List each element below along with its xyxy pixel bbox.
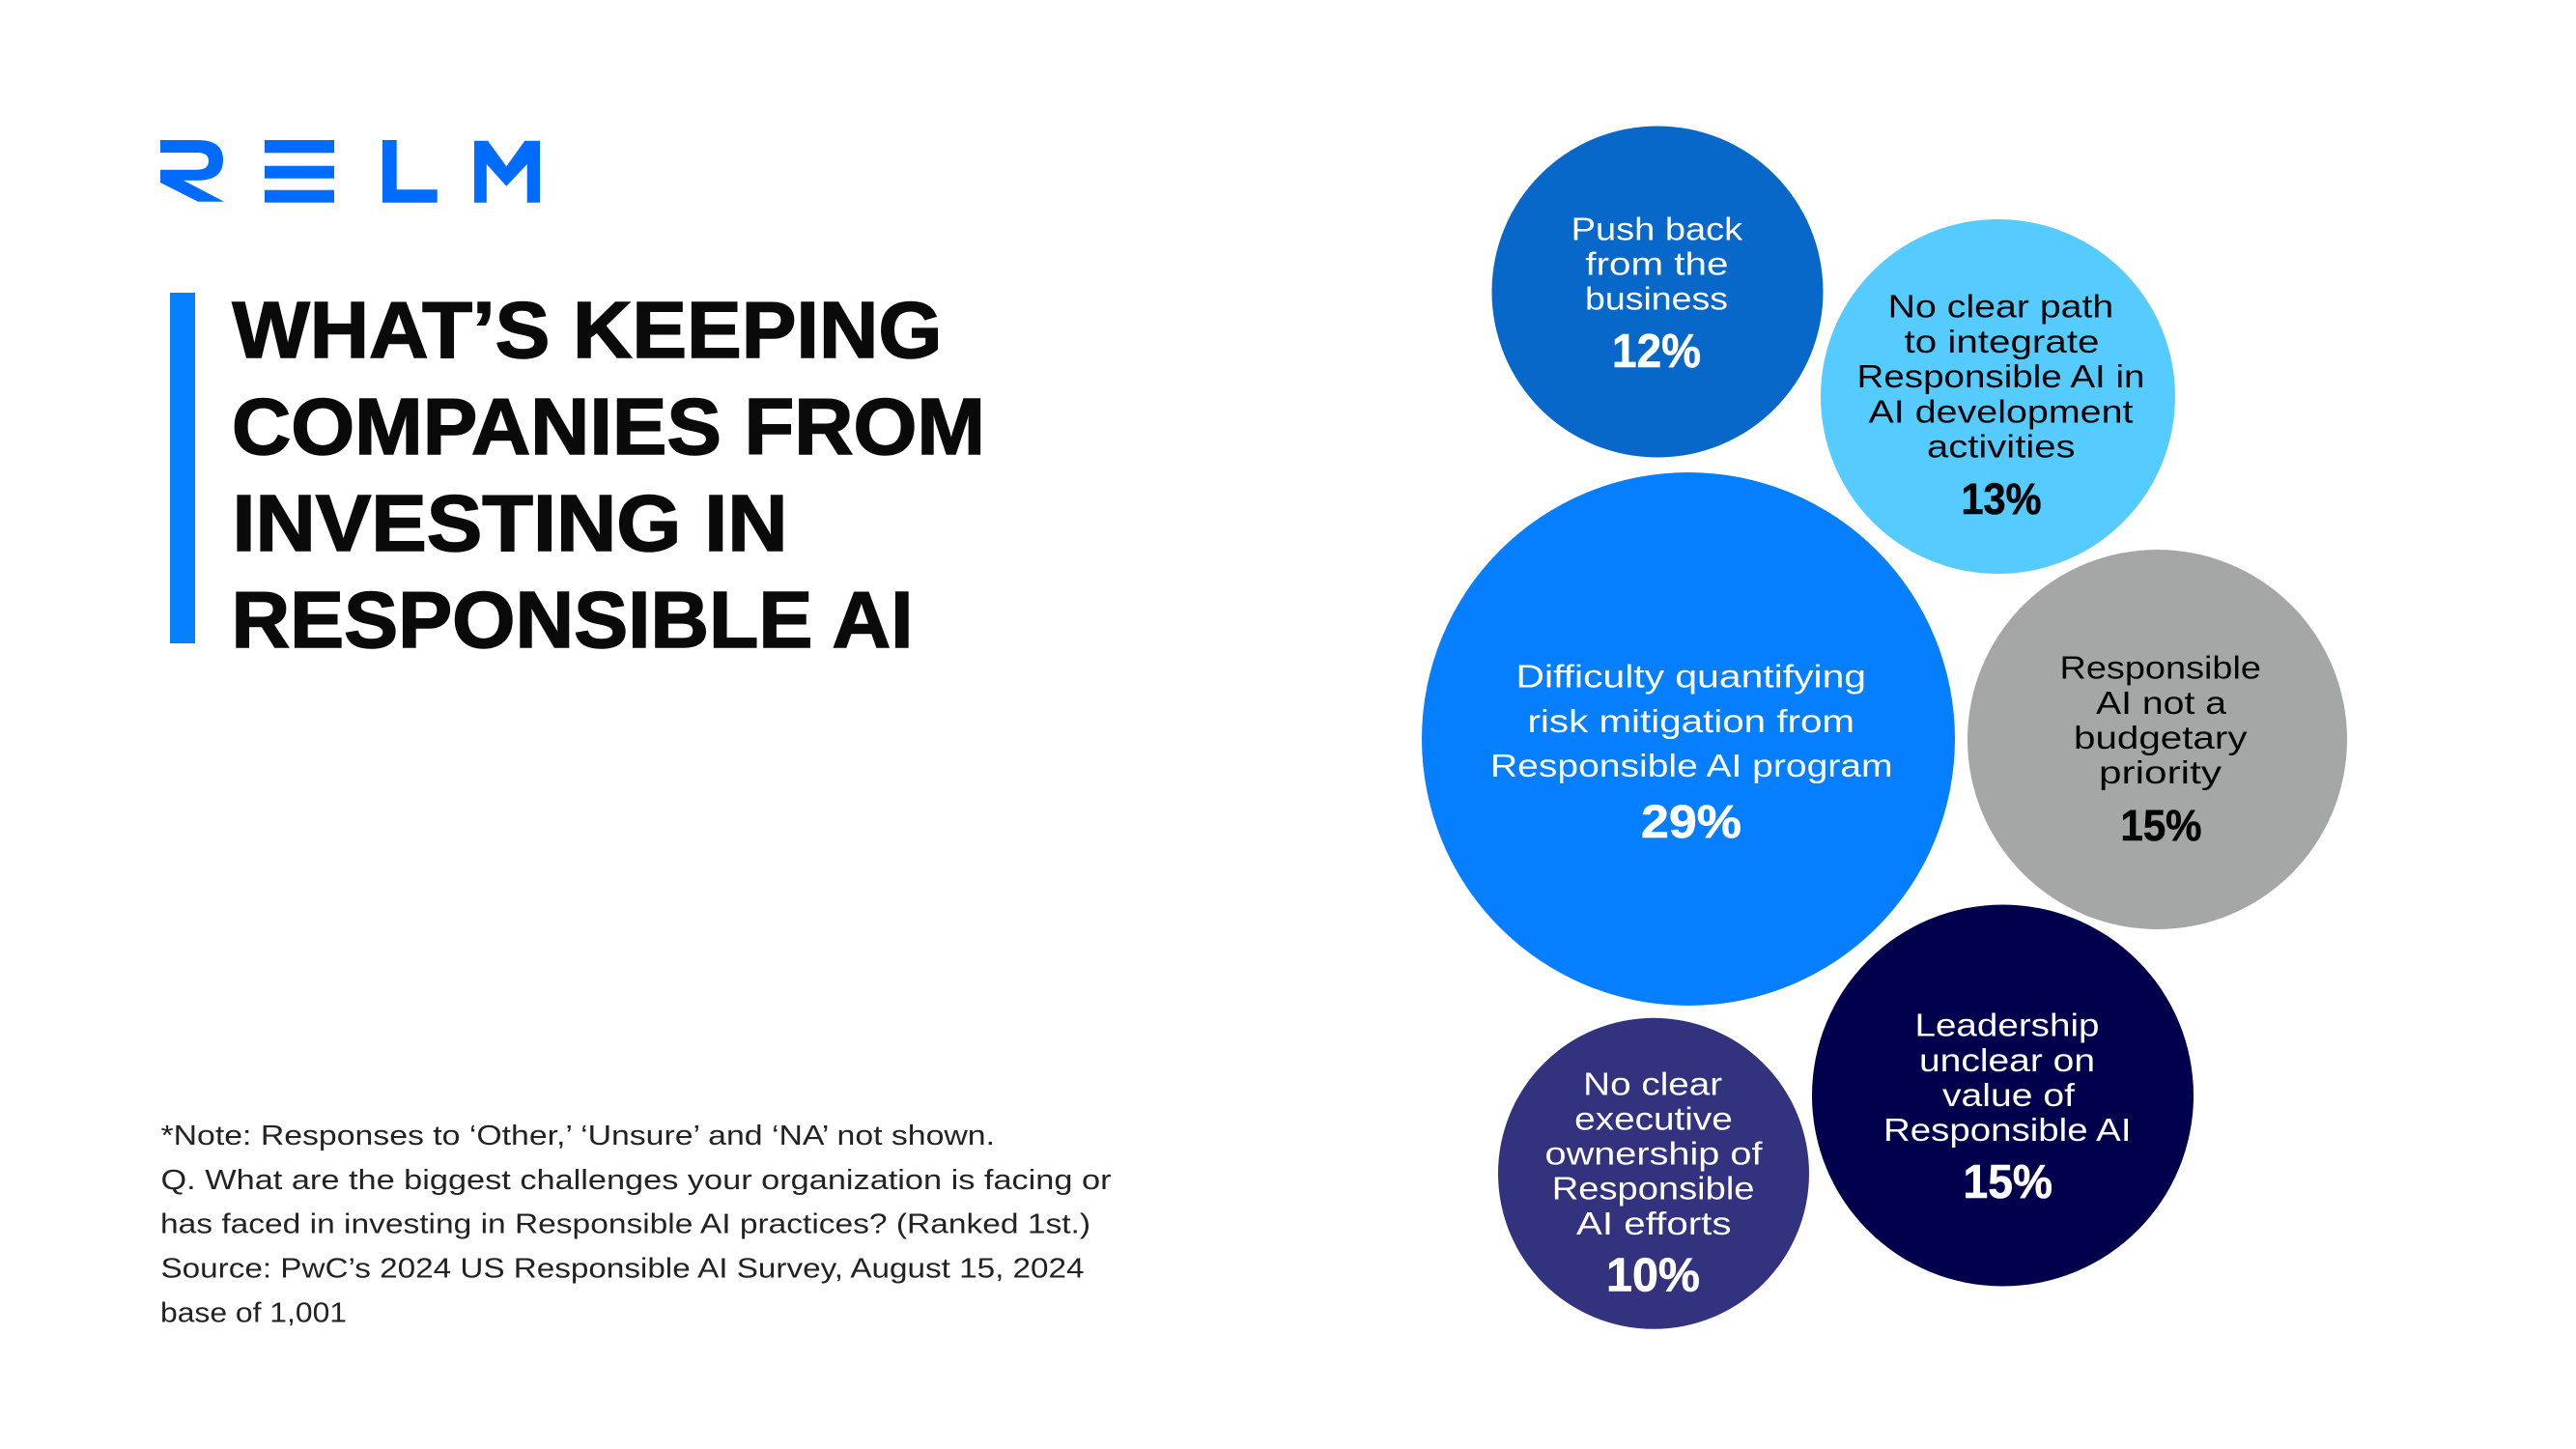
bubble: not a budgetary priority 15% — [1967, 550, 2347, 929]
bubble: no clear path to integrate 13% — [1821, 219, 2175, 574]
title: INVESTING IN — [232, 478, 788, 568]
bubble: leadership unclear on value 15%: 15% — [1963, 1156, 2052, 1208]
bubble: leadership unclear on value 15%: value of — [1942, 1077, 2076, 1113]
bubble: difficulty quantifying risk mitigation 29%: risk mitigation from — [1528, 703, 1854, 739]
bubble: no clear path to integrate 13%: to integrate — [1905, 324, 2100, 359]
bubble: difficulty quantifying risk mitigation 29% — [1422, 472, 1955, 1006]
bubble: no clear executive ownership 10%: executive — [1574, 1100, 1733, 1136]
bubble: difficulty quantifying risk mitigation 29%: Difficulty quantifying — [1516, 659, 1866, 694]
title: COMPANIES FROM — [232, 382, 985, 471]
bubble: no clear path to integrate 13%: AI development — [1868, 393, 2133, 429]
accent bar beside title — [170, 293, 195, 643]
bubble: push back from the business 12%: from the — [1585, 246, 1728, 282]
bubble: no clear path to integrate 13%: No clear path — [1888, 288, 2113, 324]
footnote: note, question and source: Source: PwC’s 2024 US Responsible AI Survey, August 15, 2024 — [160, 1253, 1084, 1284]
bubble: leadership unclear on value 15%: Leadership — [1914, 1008, 2100, 1043]
bubble: no clear path to integrate 13%: activities — [1927, 428, 2075, 464]
bubble: no clear executive ownership 10% — [1498, 1018, 1809, 1329]
bubble: not a budgetary priority 15%: budgetary — [2074, 720, 2248, 755]
footnote: note, question and source: base of 1,001 — [160, 1297, 347, 1328]
bubble: no clear executive ownership 10%: 10% — [1606, 1250, 1700, 1302]
logo: RELM — [160, 140, 540, 203]
bubble: leadership unclear on value 15% — [1812, 904, 2194, 1287]
bubble: no clear executive ownership 10%: No clear — [1583, 1065, 1722, 1101]
bubble: no clear executive ownership 10%: Responsible — [1552, 1171, 1754, 1207]
bubble: leadership unclear on value 15%: Responsible AI — [1883, 1112, 2131, 1148]
bubble: not a budgetary priority 15%: priority — [2099, 754, 2222, 790]
title — [232, 285, 985, 665]
bubble: not a budgetary priority 15%: Responsible — [2059, 650, 2261, 686]
bubble: no clear path to integrate 13%: 13% — [1961, 474, 2042, 524]
bubble: not a budgetary priority 15%: 15% — [2121, 801, 2202, 850]
bubble: push back from the business 12% — [1491, 126, 1824, 458]
bubble: no clear executive ownership 10%: AI efforts — [1576, 1206, 1731, 1241]
bubble: difficulty quantifying risk mitigation 29%: Responsible AI program — [1490, 748, 1893, 783]
footnote: note, question and source: *Note: Responses to ‘Other,’ ‘Unsure’ and ‘NA’ not shown. — [160, 1121, 995, 1151]
footnote: note, question and source: has faced in investing in Responsible AI practices? (Ranked 1st.) — [160, 1209, 1090, 1240]
footnote: note, question and source — [160, 1121, 1112, 1328]
title: RESPONSIBLE AI — [232, 575, 914, 665]
bubble: push back from the business 12%: Push back — [1571, 211, 1743, 246]
footnote: note, question and source: Q. What are the biggest challenges your organization is facing or — [160, 1165, 1112, 1196]
bubble: push back from the business 12%: 12% — [1612, 326, 1701, 378]
title: WHAT’S KEEPING — [232, 285, 943, 375]
bubble: leadership unclear on value 15%: unclear on — [1919, 1042, 2095, 1078]
bubble: difficulty quantifying risk mitigation 29%: 29% — [1641, 797, 1741, 848]
bubble: push back from the business 12%: business — [1585, 281, 1728, 317]
bubble: not a budgetary priority 15%: AI not a — [2096, 685, 2227, 721]
bubble: no clear executive ownership 10%: ownership of — [1545, 1136, 1763, 1172]
bubble: no clear path to integrate 13%: Responsible AI in — [1856, 358, 2144, 394]
